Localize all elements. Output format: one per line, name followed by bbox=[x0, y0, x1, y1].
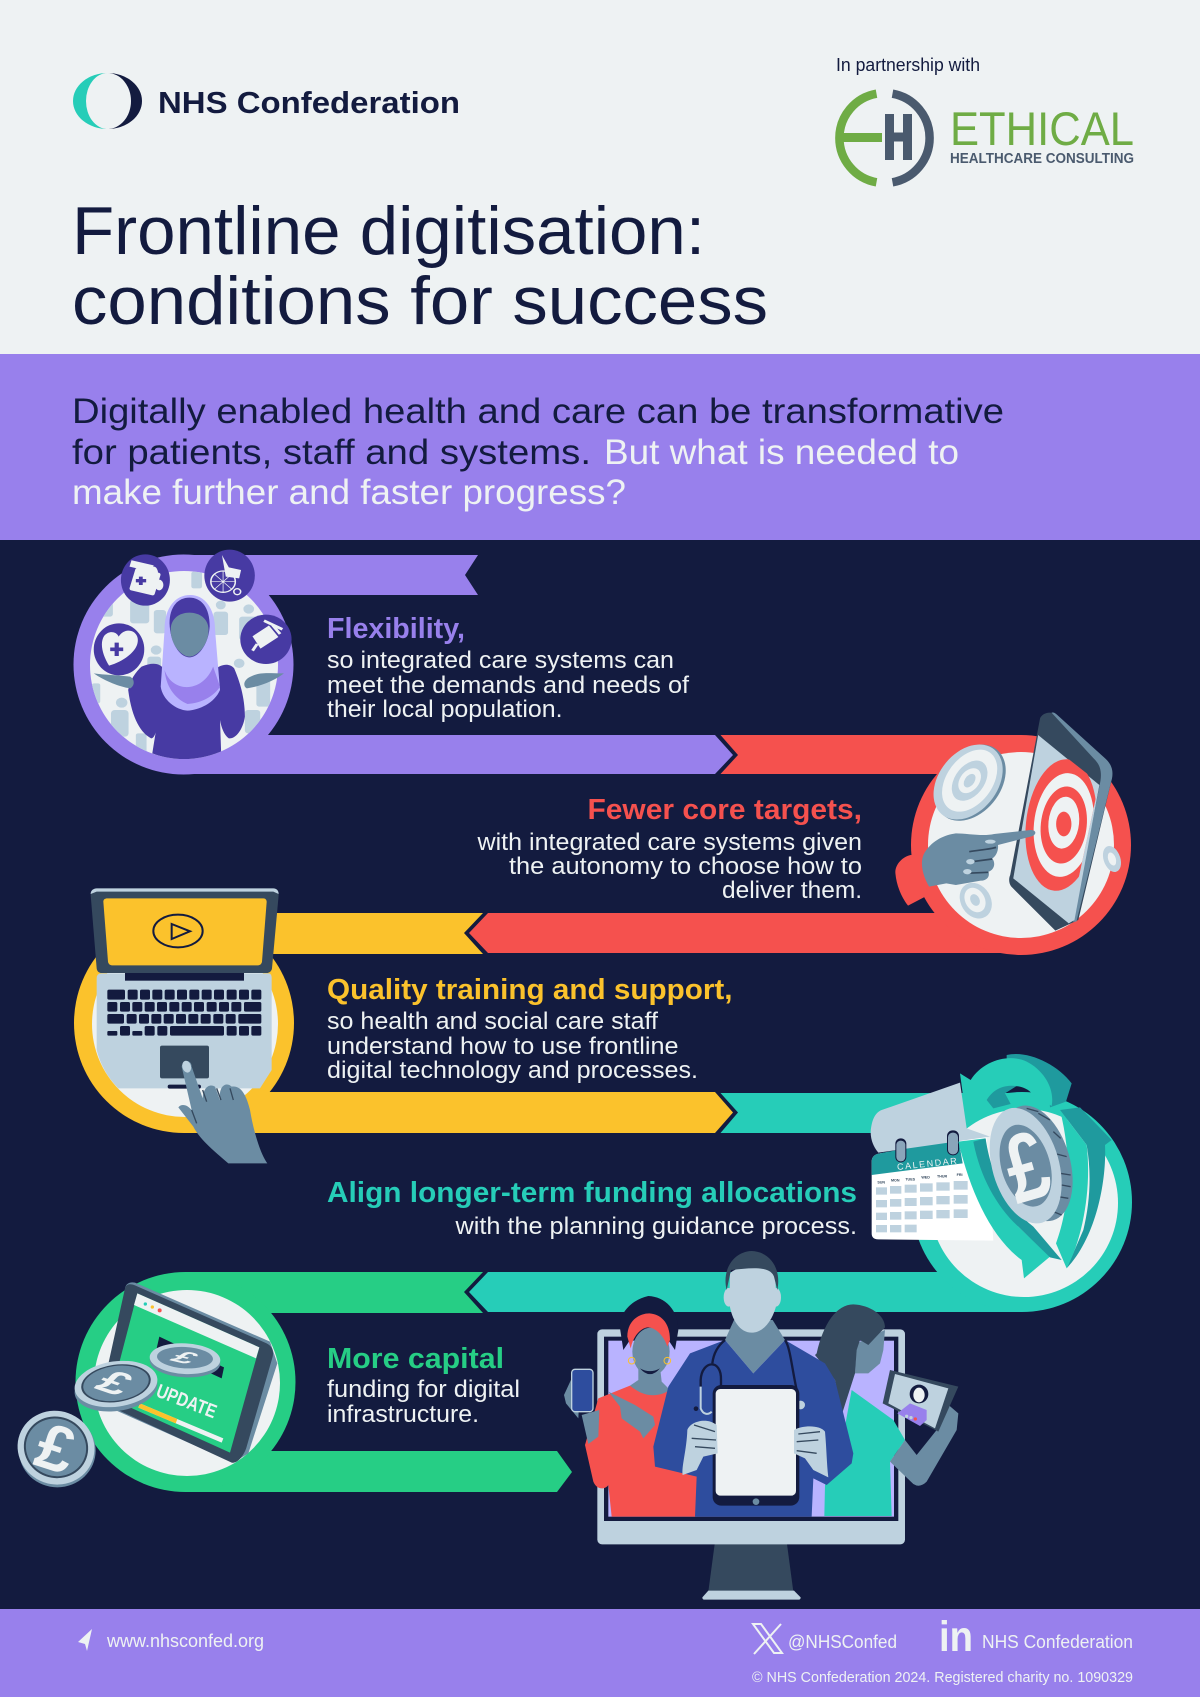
panel: quality training and support bbox=[74, 888, 733, 1163]
description: their local population. bbox=[327, 696, 562, 723]
heading: Flexibility, bbox=[327, 613, 465, 645]
illustration: tablet update and coins bbox=[7, 1282, 277, 1495]
X handle: @NHSConfed bbox=[788, 1632, 897, 1652]
illustration: health workers in monitor bbox=[564, 1251, 958, 1600]
NHS Confederation logo bbox=[73, 73, 460, 129]
illustration: phone target and pointing hand bbox=[895, 712, 1124, 931]
header band bbox=[0, 0, 1200, 354]
description: digital technology and processes. bbox=[327, 1057, 698, 1084]
intro band: But what is needed to bbox=[604, 433, 959, 472]
arrow: top bbox=[1007, 1054, 1072, 1107]
illustration: tablet update and coins: £ bbox=[164, 1348, 206, 1368]
LinkedIn name: NHS Confederation bbox=[982, 1632, 1133, 1652]
description: the autonomy to choose how to bbox=[509, 853, 862, 880]
title bbox=[72, 193, 768, 339]
title: conditions for success bbox=[72, 263, 768, 339]
monitor bbox=[597, 1329, 905, 1600]
arrow: right bbox=[1060, 1107, 1112, 1268]
illustration: calendar and pound coin: SUN bbox=[877, 1180, 885, 1184]
green ribbon bbox=[186, 1272, 572, 1492]
Ethical Healthcare Consulting logo bbox=[838, 94, 1134, 182]
title: Frontline digitisation: bbox=[72, 193, 705, 269]
intro band bbox=[0, 354, 1200, 540]
panel: fewer core targets bbox=[469, 712, 1131, 955]
heading: Quality training and support, bbox=[327, 974, 732, 1006]
website: www.nhsconfed.org bbox=[106, 1631, 264, 1651]
description: deliver them. bbox=[722, 877, 862, 904]
icon: medicine bottle bbox=[121, 554, 170, 606]
update label: UPDATE bbox=[153, 1381, 219, 1423]
icon: X bbox=[753, 1624, 782, 1654]
clinician with tablet bbox=[653, 1251, 853, 1517]
footer band bbox=[0, 1609, 1200, 1697]
description: understand how to use frontline bbox=[327, 1033, 678, 1060]
description bbox=[327, 1376, 520, 1428]
description bbox=[327, 1008, 698, 1084]
illustration: calendar and pound coin: TUES bbox=[905, 1177, 916, 1181]
description: funding for digital bbox=[327, 1376, 520, 1403]
icon: location arrow bbox=[78, 1629, 92, 1651]
description: infrastructure. bbox=[327, 1401, 479, 1428]
description bbox=[327, 647, 689, 723]
coin: lower: £ bbox=[27, 1408, 84, 1488]
illustration: calendar and pound coin bbox=[871, 1054, 1112, 1278]
description: so health and social care staff bbox=[327, 1008, 658, 1035]
illustration: woman juggling care icons bbox=[92, 550, 292, 760]
Ethical Healthcare Consulting logo: HEALTHCARE CONSULTING bbox=[950, 151, 1134, 167]
description: with integrated care systems given bbox=[476, 829, 862, 856]
coin: middle bbox=[72, 1356, 160, 1417]
coin: £ bbox=[993, 1110, 1061, 1225]
illustration: laptop with hand bbox=[91, 888, 279, 1163]
panel: flexibility bbox=[74, 550, 733, 774]
woman with tablet bbox=[815, 1304, 958, 1516]
icon: play button bbox=[153, 915, 203, 947]
panel: more capital bbox=[7, 1272, 572, 1495]
description: so integrated care systems can bbox=[327, 647, 674, 674]
coin: lower bbox=[7, 1400, 105, 1495]
icon: wheelchair bbox=[204, 550, 255, 602]
intro band: for patients, staff and systems. bbox=[72, 433, 591, 472]
red ribbon bbox=[469, 735, 1021, 953]
illustration: calendar and pound coin: WED bbox=[921, 1176, 930, 1180]
heading: More capital bbox=[327, 1343, 504, 1375]
yellow ribbon bbox=[184, 913, 733, 1133]
Ethical Healthcare Consulting logo: ETHICAL bbox=[950, 102, 1134, 155]
panel: longer-term funding bbox=[327, 1054, 1132, 1312]
coin bbox=[977, 1097, 1085, 1232]
description bbox=[476, 829, 862, 904]
heading: Fewer core targets, bbox=[588, 794, 862, 826]
intro band: Digitally enabled health and care can be transformative bbox=[72, 392, 1004, 431]
stethoscope bbox=[701, 1340, 797, 1414]
icon: syringe bbox=[240, 615, 292, 664]
woman with phone bbox=[564, 1296, 700, 1517]
illustration: calendar and pound coin: MON bbox=[891, 1179, 900, 1183]
description: meet the demands and needs of bbox=[327, 672, 689, 699]
partnership label: In partnership with bbox=[836, 55, 980, 75]
purple ribbon bbox=[184, 555, 733, 774]
arrow: left bbox=[958, 1138, 1050, 1278]
keyboard bbox=[107, 990, 261, 1036]
copyright: © NHS Confederation 2024. Registered charity no. 1090329 bbox=[752, 1670, 1133, 1686]
teal ribbon bbox=[469, 1093, 1022, 1312]
illustration: calendar and pound coin: FRI bbox=[957, 1173, 963, 1177]
description: with the planning guidance process. bbox=[454, 1213, 857, 1240]
calendar label: CALENDAR bbox=[896, 1156, 958, 1172]
icon: LinkedIn: in bbox=[939, 1613, 973, 1661]
NHS Confederation logo: NHS Confederation bbox=[158, 85, 460, 120]
coin: middle: £ bbox=[87, 1363, 142, 1403]
illustration: calendar and pound coin: THUR bbox=[937, 1174, 948, 1178]
heading: Align longer-term funding allocations bbox=[327, 1177, 857, 1209]
icon: heart bbox=[94, 623, 144, 675]
intro band: make further and faster progress? bbox=[72, 473, 626, 512]
